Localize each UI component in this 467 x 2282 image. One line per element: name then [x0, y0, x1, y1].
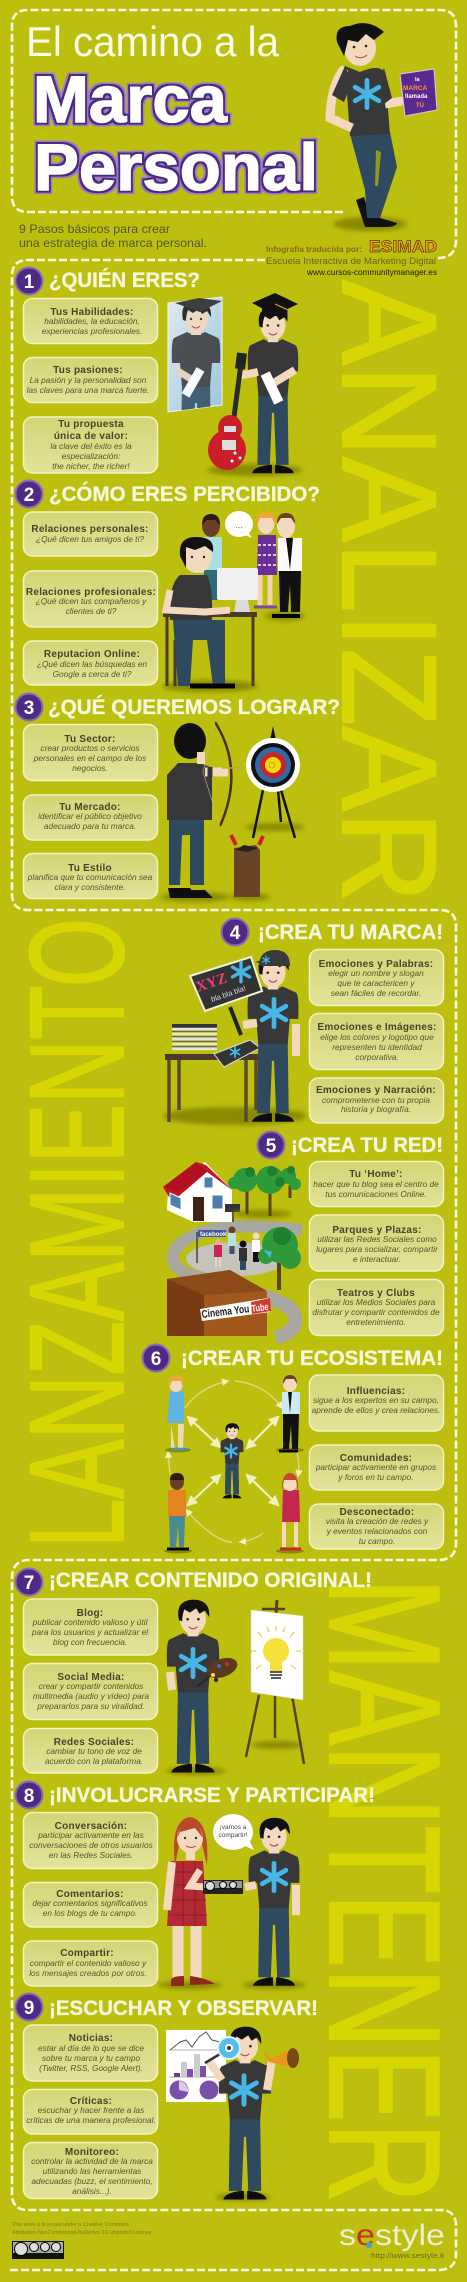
card: Tu propuesta	[24, 417, 158, 473]
card: Conversación	[24, 1812, 158, 1868]
card: Comentarios: Comentarios:	[56, 1889, 124, 1900]
card: Emociones y Palabras: Emociones y Palabras:	[319, 959, 433, 970]
card: Comunidades: Comunidades:	[340, 1453, 412, 1464]
card: Tus Habilidades: Tus Habilidades:	[50, 307, 134, 318]
title: El camino a la	[26, 18, 280, 65]
card: Reputacion Online	[24, 641, 158, 685]
illustration: man with magnifier, horn and charts	[166, 2027, 299, 2201]
step 2 heading: 2	[24, 485, 34, 506]
card: Parques y Plazas: e interactuar.	[353, 1254, 401, 1264]
card: Tu propuesta: única de valor:	[54, 431, 128, 442]
card: Críticas	[24, 2090, 158, 2134]
speech bubble: ...	[235, 520, 243, 530]
illustration: man at desk and colleagues	[162, 511, 305, 692]
title: Marca	[33, 62, 228, 136]
card: Compartir: Compartir:	[60, 1948, 114, 1959]
illustration: man with book	[330, 23, 437, 231]
card: Relaciones profesionales: ¿Qué dicen tus compañeros y	[36, 596, 147, 606]
card: Tus pasiones: las claves para una marca fuerte.	[27, 385, 149, 395]
card: Social Media: prepararlos para su viralidad.	[36, 1701, 145, 1711]
card: Tu Sector: personales en el campo de los	[33, 753, 146, 763]
step 3 heading: 3	[24, 698, 34, 719]
step 8 heading: 8	[24, 1786, 34, 1807]
card: Críticas: críticas de una manera profesional.	[26, 2115, 156, 2125]
step 6 heading: ¡CREAR TU ECOSISTEMA!	[181, 1347, 443, 1370]
card: Tu Mercado: identificar el público objetivo	[38, 811, 142, 821]
card: Compartir: los mensajes creados por otros.	[29, 1968, 147, 1978]
card: Relaciones profesionales	[24, 571, 158, 627]
card: Desconectado: tu campo.	[359, 1536, 395, 1546]
step 1 heading	[16, 268, 200, 294]
step 5 heading	[258, 1132, 443, 1158]
card: Comunidades: participar activamente en grupos	[315, 1462, 436, 1472]
card: Compartir	[24, 1941, 158, 1986]
card: Tus pasiones	[24, 358, 158, 402]
credit: www.cursos-communitymanager.es	[306, 268, 437, 277]
card: Redes Sociales	[24, 1728, 158, 1773]
card: Críticas: escuchar y hacer frente a las	[38, 2105, 144, 2115]
chart panel	[166, 2030, 226, 2102]
card: Tu Estilo: planifica que tu comunicación sea	[27, 872, 153, 882]
card: Tu Home: tus comunicaciones Online.	[325, 1189, 427, 1199]
card: Tu Estilo: Tu Estilo	[68, 863, 112, 874]
card: Redes Sociales: acuerdo con la plataforma.	[45, 1756, 143, 1766]
card: Noticias: Noticias:	[69, 2033, 113, 2044]
card: Tu propuesta: the nicher, the richer!	[52, 461, 130, 471]
card: Teatros y Clubs: Teatros y Clubs	[337, 1288, 415, 1299]
person: centre man	[221, 1423, 243, 1498]
card: Social Media: multimedia (audio y vídeo) para	[33, 1691, 149, 1701]
step 5 heading: ¡CREA TU RED!	[291, 1134, 443, 1157]
card: Reputacion Online: Google a cerca de ti?	[53, 669, 132, 679]
card: Noticias: estar al día de lo que se dice	[38, 2043, 144, 2053]
person: centre star	[225, 1444, 237, 1458]
card: Redes Sociales: Redes Sociales:	[54, 1737, 134, 1748]
illustration: man with sign, books on table: XYZ	[194, 970, 229, 996]
speech bubble: ¡vamos a	[220, 1824, 247, 1831]
card: Monitoreo: utilizando las herramientas	[43, 2166, 141, 2176]
card: Comentarios	[24, 1882, 158, 1927]
card: Blog: publicar contenido valioso y útil	[32, 1617, 149, 1627]
card: Tu Sector	[24, 724, 158, 780]
card: Teatros y Clubs: entretenimiento.	[346, 1317, 406, 1327]
card: Monitoreo: Monitoreo:	[65, 2147, 119, 2158]
CC card	[203, 1880, 243, 1894]
card: Tus Habilidades: experiencias profesionales.	[42, 326, 142, 336]
card: Tus Habilidades: habilidades, la educación,	[44, 316, 140, 326]
card: Conversación: en las Redes Sociales.	[49, 1850, 133, 1860]
illustration: ecosystem of people	[164, 1375, 304, 1554]
card: Blog: para los usuarios y actualizar el	[31, 1627, 149, 1637]
person: girl in red	[276, 1473, 304, 1554]
card: Teatros y Clubs	[310, 1280, 444, 1336]
card: Conversación: participar activamente en las	[37, 1830, 144, 1840]
card: Monitoreo: análisis...).	[72, 2186, 112, 2196]
sestyle logo: sestyle	[339, 2219, 445, 2252]
card: Comunidades	[310, 1445, 444, 1490]
step 3 heading: ¿QUÉ QUEREMOS LOGRAR?	[48, 696, 340, 719]
card: Tu Home: Tu ‘Home’:	[349, 1169, 403, 1180]
illustration: man with book: la	[415, 77, 421, 83]
card: Teatros y Clubs: disfrutar y compartir contenidos de	[312, 1307, 440, 1317]
card: Emociones y Palabras: que te caractericen y	[337, 978, 415, 988]
card: Tu Home: hacer que tu blog sea el centro de	[313, 1179, 439, 1189]
illustration: man with sign, books on table: bla bla bla!	[210, 984, 247, 1004]
footer licence text	[12, 2222, 153, 2236]
card: Relaciones personales: ¿Qué dicen tus amigos de ti?	[36, 534, 144, 544]
card: Emociones y Narración: historia y biografía.	[341, 1104, 411, 1114]
card: Conversación: conversaciones de otros usuarios	[29, 1840, 153, 1850]
card: Parques y Plazas	[310, 1215, 444, 1271]
card: Reputacion Online: Reputacion Online:	[44, 649, 140, 660]
card: Desconectado: visita la creación de redes y	[326, 1516, 429, 1526]
credit: ESIMAD	[369, 238, 437, 256]
card: Relaciones profesionales: clientes de ti?	[66, 606, 117, 616]
illustration: man with mirror and guitar	[168, 293, 303, 476]
step 1 heading: ¿QUIÉN ERES?	[49, 269, 200, 292]
step 6 heading: 6	[151, 1349, 161, 1370]
card: Desconectado: y eventos relacionados con	[326, 1526, 428, 1536]
subtitle: una estrategia de marca personal.	[19, 236, 207, 250]
card: Influencias: sigue a los expertos en su campo,	[313, 1395, 439, 1405]
card: Tu Sector: Tu Sector:	[64, 734, 116, 745]
card: Desconectado: Desconectado:	[340, 1507, 414, 1518]
vertical word: ANALIZAR: ANALIZAR	[314, 280, 463, 903]
step 1 heading: 1	[24, 272, 35, 293]
title	[26, 18, 318, 204]
card: Teatros y Clubs: utilizar los Medios Sociales para	[317, 1297, 436, 1307]
step 2 heading: ¿CÓMO ERES PERCIBIDO?	[49, 482, 320, 506]
card: Monitoreo: controlar la actividad de la marca	[31, 2156, 153, 2166]
card: Parques y Plazas: Parques y Plazas:	[332, 1225, 422, 1236]
card: Social Media: crear y compartir contenidos	[39, 1681, 143, 1691]
card: Noticias	[24, 2025, 158, 2081]
step 4 heading: 4	[230, 923, 241, 944]
vertical word: LANZAMIENTO: LANZAMIENTO	[3, 918, 152, 1548]
card: Parques y Plazas: utilizar las Redes Sociales como	[317, 1234, 437, 1244]
card: Tu Estilo	[24, 854, 158, 898]
person: girl in blue	[165, 1375, 191, 1452]
card: Tu Estilo: clara y consistente.	[54, 882, 126, 892]
illustration: girl and man sharing CC licence	[158, 1814, 306, 1989]
step 5 heading: 5	[266, 1136, 277, 1157]
speech bubble	[225, 511, 253, 538]
footer licence text: This work is licensed under a Creative Commons	[12, 2222, 130, 2228]
card: Blog: blog con frecuencia.	[53, 1637, 127, 1647]
step 7 heading: 7	[24, 1573, 34, 1594]
card: Redes Sociales: cambiar tu tono de voz de	[46, 1746, 142, 1756]
card: Tu Sector: crear productos o servicios	[40, 743, 140, 753]
illustration: archer and target	[160, 722, 305, 902]
illustration: house, park, cinema: Cinema You	[201, 1303, 250, 1321]
footer licence text: Attribution-NonCommercial-NoDerivs 3.0 Unported License.	[12, 2230, 153, 2236]
card: Influencias: aprende de ellos y crea relaciones.	[312, 1405, 440, 1415]
card: Tu propuesta: Tu propuesta	[58, 419, 124, 430]
card: Blog	[24, 1599, 158, 1655]
step 4 heading: ¡CREA TU MARCA!	[258, 921, 443, 944]
card: Tu Sector: negocios.	[72, 763, 108, 773]
card: Tu propuesta: especialización:	[62, 451, 120, 461]
card: Emociones y Narración	[310, 1078, 444, 1123]
speech bubble: compartir!	[219, 1832, 248, 1839]
illustration: house, park, cinema	[163, 1162, 302, 1338]
credit: Escuela Interactiva de Marketing Digital	[266, 256, 436, 266]
card: Reputacion Online: ¿Qué dicen las búsquedas en	[37, 659, 147, 669]
subtitle	[19, 222, 207, 250]
step 7 heading: ¡CREAR CONTENIDO ORIGINAL!	[49, 1569, 372, 1592]
card: Críticas: Críticas:	[70, 2096, 112, 2107]
card: Relaciones profesionales: Relaciones profesionales:	[26, 587, 156, 598]
step 4 heading	[222, 918, 443, 946]
title: Personal	[34, 130, 318, 204]
illustration: painter and easel	[166, 1600, 304, 1775]
person: boy in orange	[164, 1473, 192, 1554]
card: Blog: Blog:	[77, 1608, 103, 1619]
credit: Infografía traducida por:	[266, 245, 362, 254]
card: Tu Mercado: Tu Mercado:	[59, 802, 121, 813]
card: Tu Mercado	[24, 795, 158, 840]
card: Noticias: sobre tu marca y tu campo	[42, 2053, 140, 2063]
subtitle: 9 Pasos básicos para crear	[19, 222, 170, 236]
card: Emociones y Narración: comprometerse con tu propia	[322, 1095, 430, 1105]
card: Monitoreo: adecuadas (buzz, el sentimiento,	[31, 2176, 153, 2186]
card: Emociones e Imágenes	[310, 1014, 444, 1070]
card: Influencias: Influencias:	[347, 1386, 405, 1397]
speech bubble	[213, 1814, 254, 1850]
card: Desconectado	[310, 1504, 444, 1549]
card: Emociones y Palabras: sean fáciles de recordar.	[331, 988, 421, 998]
card: Emociones e Imágenes: corporativa.	[355, 1052, 399, 1062]
card: Relaciones personales: Relaciones personales:	[31, 524, 149, 535]
card: Emociones e Imágenes: elige los colores y logotipo que	[320, 1032, 434, 1042]
step 8 heading: ¡INVOLUCRARSE Y PARTICIPAR!	[49, 1784, 375, 1807]
CC badge	[12, 2241, 64, 2259]
card: Influencias	[310, 1375, 444, 1431]
card: Conversación: Conversación:	[55, 1821, 127, 1832]
credit	[266, 238, 437, 277]
card: Monitoreo	[24, 2142, 158, 2198]
step 9 heading: ¡ESCUCHAR Y OBSERVAR!	[49, 1997, 318, 2020]
card: Emociones e Imágenes: representen tu identidad	[332, 1042, 422, 1052]
illustration: man with sign, books on table	[163, 950, 307, 1125]
card: Social Media	[24, 1664, 158, 1720]
card: Tu Mercado: adecuado para tu marca.	[44, 821, 136, 831]
card: Tus pasiones: Tus pasiones:	[53, 365, 123, 376]
card: Noticias: (Twitter, RSS, Google Alert).	[39, 2063, 143, 2073]
card: Comentarios: en los blogs de tu campo.	[43, 1908, 137, 1918]
card: Tu propuesta: la clave del éxito es la	[50, 441, 132, 451]
illustration: house, park, cinema: facebook	[200, 1232, 227, 1238]
card: Social Media: Social Media:	[57, 1672, 125, 1683]
card: Relaciones personales	[24, 512, 158, 556]
illustration: man with book: TÚ	[416, 102, 424, 109]
card: Tus pasiones: La pasión y la personalidad son	[30, 375, 147, 385]
illustration: man with book: llamada	[405, 94, 428, 100]
card: Emociones e Imágenes: Emociones e Imágenes:	[317, 1022, 437, 1033]
card: Parques y Plazas: lugares para socializar, compartir	[316, 1244, 439, 1254]
illustration: man with book: MARCA	[403, 85, 427, 92]
sestyle logo: http://www.sestyle.it	[371, 2251, 445, 2260]
card: Comentarios: dejar comentarios significativos	[32, 1898, 148, 1908]
illustration: house, park, cinema: Tube	[251, 1302, 270, 1315]
card: Emociones y Narración: Emociones y Narración:	[316, 1085, 436, 1096]
card: Compartir: compartir el contenido valioso y	[30, 1958, 147, 1968]
card: Emociones y Palabras: elegir un nombre y slogan	[328, 968, 424, 978]
card: Tu Home	[310, 1162, 444, 1206]
person: man with tie	[276, 1375, 304, 1452]
card: Emociones y Palabras	[310, 950, 444, 1006]
card: Tus Habilidades	[24, 298, 158, 344]
step 9 heading: 9	[24, 1998, 34, 2019]
card: Comunidades: y foros en tu campo.	[337, 1472, 414, 1482]
